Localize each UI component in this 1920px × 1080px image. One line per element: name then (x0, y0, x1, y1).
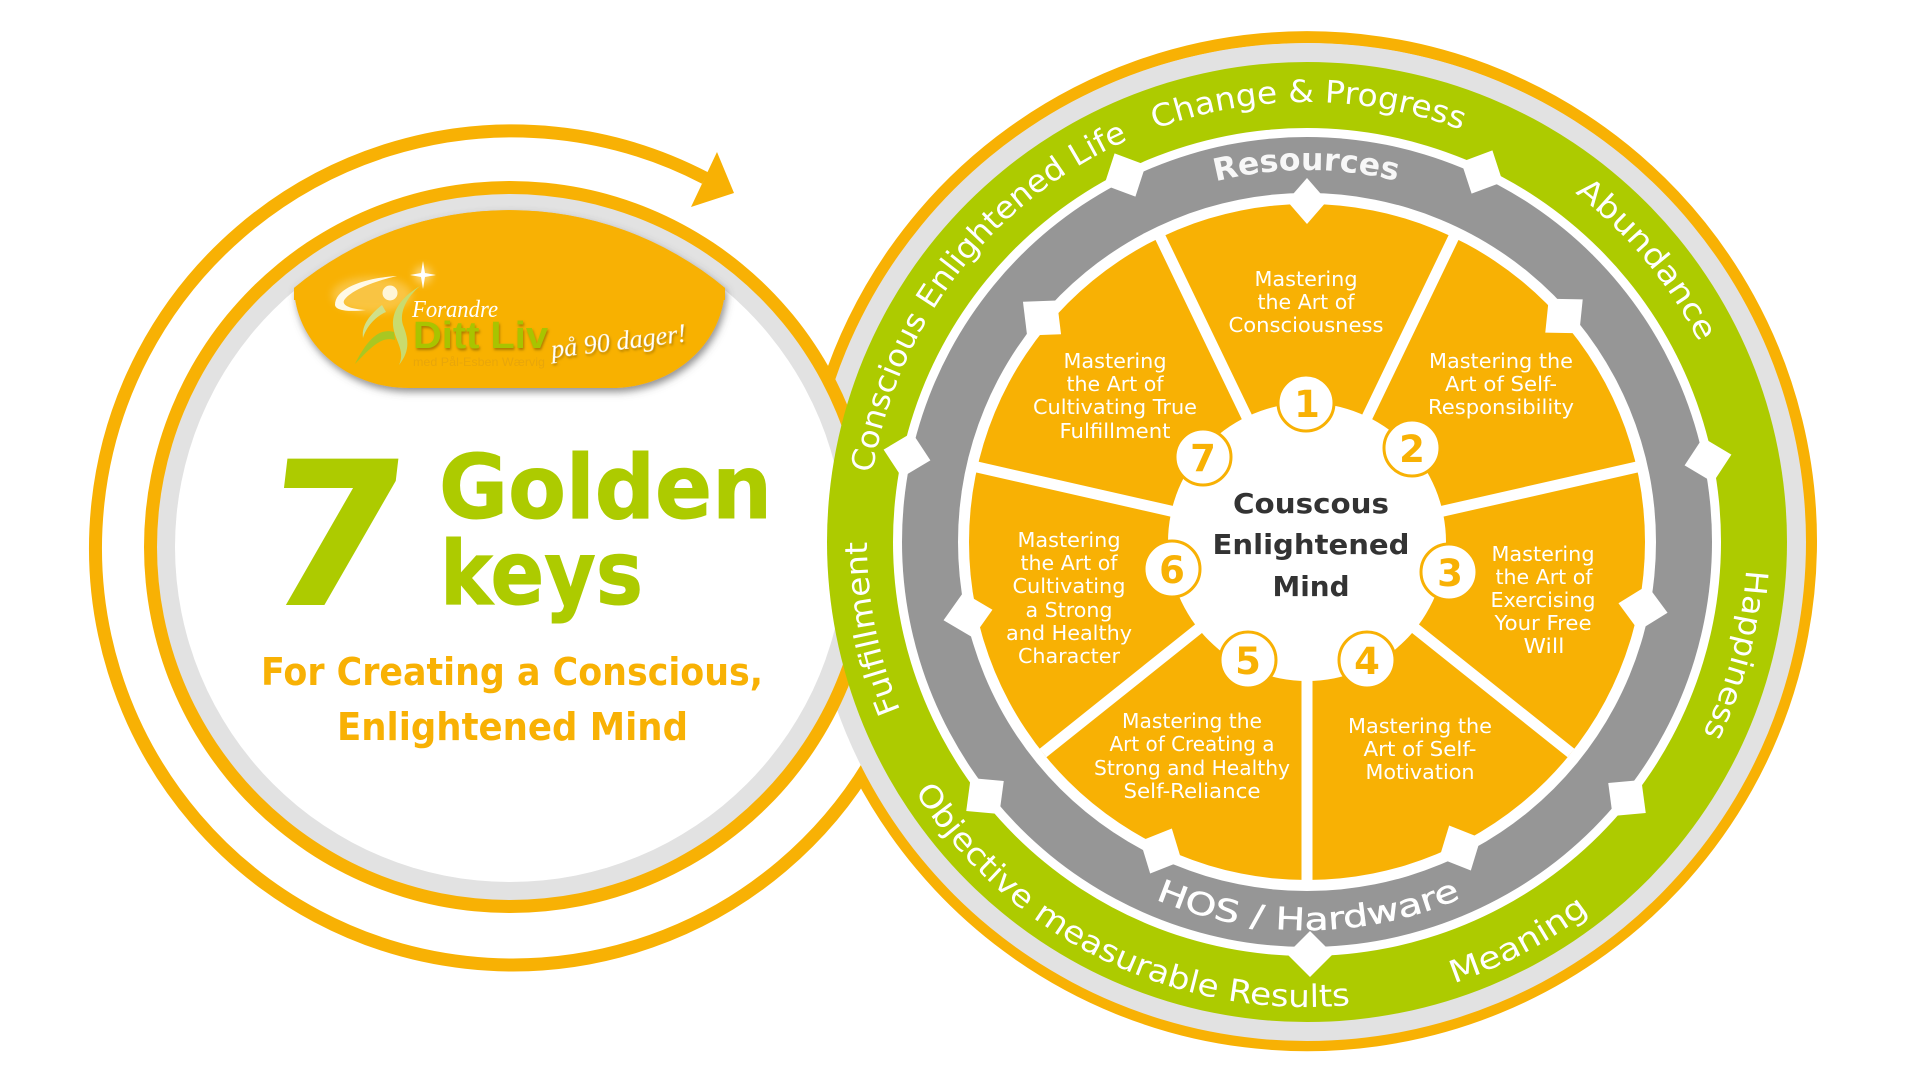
number badge 6: 6 (1159, 549, 1185, 592)
sector 2 text: Responsibility (1428, 395, 1574, 419)
sector 3 text: the Art of (1496, 565, 1593, 589)
ring label Resources: Resources (1214, 153, 1398, 181)
ring label Abundance: Abundance (1575, 182, 1711, 340)
number badge 4: 4 (1354, 640, 1380, 683)
number badge 2: 2 (1399, 428, 1425, 471)
outer ring diamonds (878, 140, 1737, 977)
number badge 5 (1220, 632, 1276, 688)
sector 6 text: Mastering (1018, 528, 1120, 552)
subtitle: For Creating a Conscious, (261, 650, 763, 694)
central hub: Couscous (1233, 487, 1389, 520)
sector 5 text: Art of Creating a (1110, 732, 1274, 756)
ring label Change and Progress: Change & Progress (1152, 79, 1465, 128)
logo badge (294, 210, 725, 388)
green outcomes ring (827, 62, 1787, 1022)
ring label Objective measurable Results: Objective measurable Results (920, 784, 1348, 1008)
sector 7 text: the Art of (1066, 372, 1164, 396)
number badge 1 (1278, 375, 1334, 431)
sector 7 text: Mastering (1064, 349, 1166, 373)
sector 4 text (1348, 714, 1492, 784)
sector 3 text: Mastering (1492, 542, 1594, 566)
sector 6 text: a Strong (1026, 598, 1112, 622)
sector 2 text (1428, 349, 1574, 419)
sector 1 text (1228, 267, 1384, 337)
sector 3 text: Exercising (1490, 588, 1596, 612)
central hub: Enlightened (1212, 528, 1410, 561)
sector 4 text: Art of Self- (1364, 737, 1476, 761)
number badge 6 (1144, 541, 1200, 597)
central hub: Mind (1272, 570, 1350, 603)
logo word Forandre: Forandre (411, 297, 498, 323)
heading Golden keys: Golden (439, 436, 772, 539)
ring label Meaning: Meaning (1449, 900, 1588, 982)
sector 7 text: Fulfillment (1060, 419, 1171, 443)
numeral 7: 7 (253, 421, 418, 651)
white divider and gray resources ring (893, 128, 1721, 956)
sector 1 text: Mastering (1254, 267, 1358, 291)
sector 1 text: the Art of (1258, 290, 1355, 314)
heading Golden keys: keys (440, 522, 643, 625)
big wheel outer orange ring (803, 37, 1811, 1045)
sector 5 text: Strong and Healthy (1094, 756, 1290, 780)
inner ring diamonds (939, 178, 1672, 884)
sector 7 text (1033, 349, 1197, 443)
number badge 4 (1339, 632, 1395, 688)
sector 5 text: Self-Reliance (1124, 779, 1260, 803)
number badge 5: 5 (1235, 640, 1261, 683)
ring label HOS / Hardware: HOS / Hardware (1158, 879, 1458, 931)
sector 6 text: the Art of (1020, 551, 1118, 575)
sector 4 text: Mastering the (1348, 714, 1492, 738)
sector 5 text: Mastering the (1122, 709, 1262, 733)
number badge 7: 7 (1190, 437, 1216, 480)
ring label Happiness: Happiness (1705, 572, 1768, 739)
number badge 3 (1421, 544, 1477, 600)
seven orange key sectors (969, 204, 1645, 880)
number badge 3: 3 (1437, 552, 1463, 595)
sector 6 text: and Healthy (1006, 621, 1132, 645)
logo words Ditt Liv: Ditt Liv (413, 315, 548, 357)
sector 2 text: Mastering the (1429, 349, 1573, 373)
sector 6 text: Cultivating (1012, 574, 1126, 598)
logo byline: med Pål-Esben Wærvig (413, 355, 545, 369)
heading Golden keys (439, 436, 772, 625)
sector 6 text (1006, 528, 1132, 668)
sector 4 text: Motivation (1366, 760, 1474, 784)
sector 6 text: Character (1018, 644, 1121, 668)
sector 2 text: Art of Self- (1445, 372, 1557, 396)
ring label Conscious Enlightened Life: Conscious Enlightened Life (852, 127, 1126, 470)
number badge 2 (1384, 420, 1440, 476)
sector 7 text: Cultivating True (1033, 395, 1197, 419)
number badge 1: 1 (1294, 383, 1320, 426)
subtitle (261, 650, 763, 749)
sector 1 text: Consciousness (1228, 313, 1384, 337)
sector 3 text: Your Free (1493, 611, 1592, 635)
sector 3 text (1490, 542, 1596, 658)
sector 5 text (1094, 709, 1290, 803)
central hub (1168, 403, 1446, 681)
sector 3 text: Will (1524, 634, 1564, 658)
circular arrow head (691, 152, 734, 207)
big wheel light gray ring (808, 43, 1806, 1041)
ring label Fulfillment: Fulfillment (845, 542, 900, 716)
logo words pa 90 dager: på 90 dager! (547, 319, 688, 364)
circular arrow shaft (96, 131, 880, 965)
left circle panel (144, 181, 876, 913)
number badge 7 (1175, 429, 1231, 485)
subtitle: Enlightened Mind (337, 705, 688, 749)
